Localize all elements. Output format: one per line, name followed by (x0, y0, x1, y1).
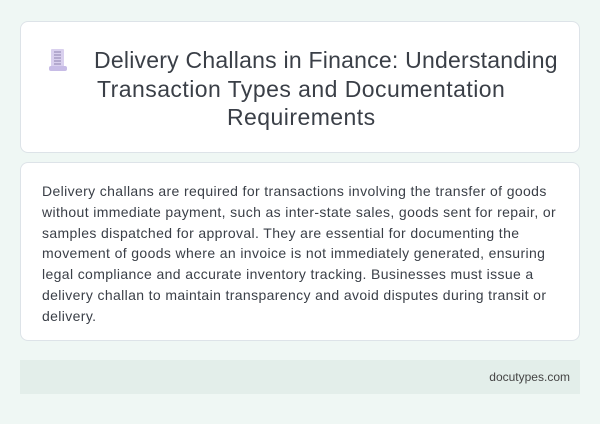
text block: movement of goods where an invoice is not immediately generated, ensuring (42, 245, 545, 261)
title: Transaction Types and Documentation (97, 76, 505, 102)
text block: legal compliance and accurate inventory tracking. Businesses must issue a (42, 266, 534, 282)
text block: delivery challan to maintain transparency and avoid disputes during transit or (42, 287, 546, 303)
icon: document (49, 49, 67, 71)
text block: Delivery challans are required for transactions involving the transfer of goods (42, 183, 547, 199)
footer (20, 360, 580, 394)
panel: description text (20, 162, 580, 341)
panel: title card (20, 21, 580, 153)
title: Requirements (227, 104, 376, 130)
text block: without immediate payment, such as inter-state sales, goods sent for repair, or (42, 204, 556, 220)
title: Delivery Challans in Finance: Understanding (94, 47, 558, 73)
text block: samples dispatched for approval. They are essential for documenting the (42, 225, 519, 241)
title (94, 47, 558, 130)
footer text: docutypes.com (489, 370, 570, 384)
text block (42, 183, 556, 324)
text block: delivery. (42, 308, 96, 324)
